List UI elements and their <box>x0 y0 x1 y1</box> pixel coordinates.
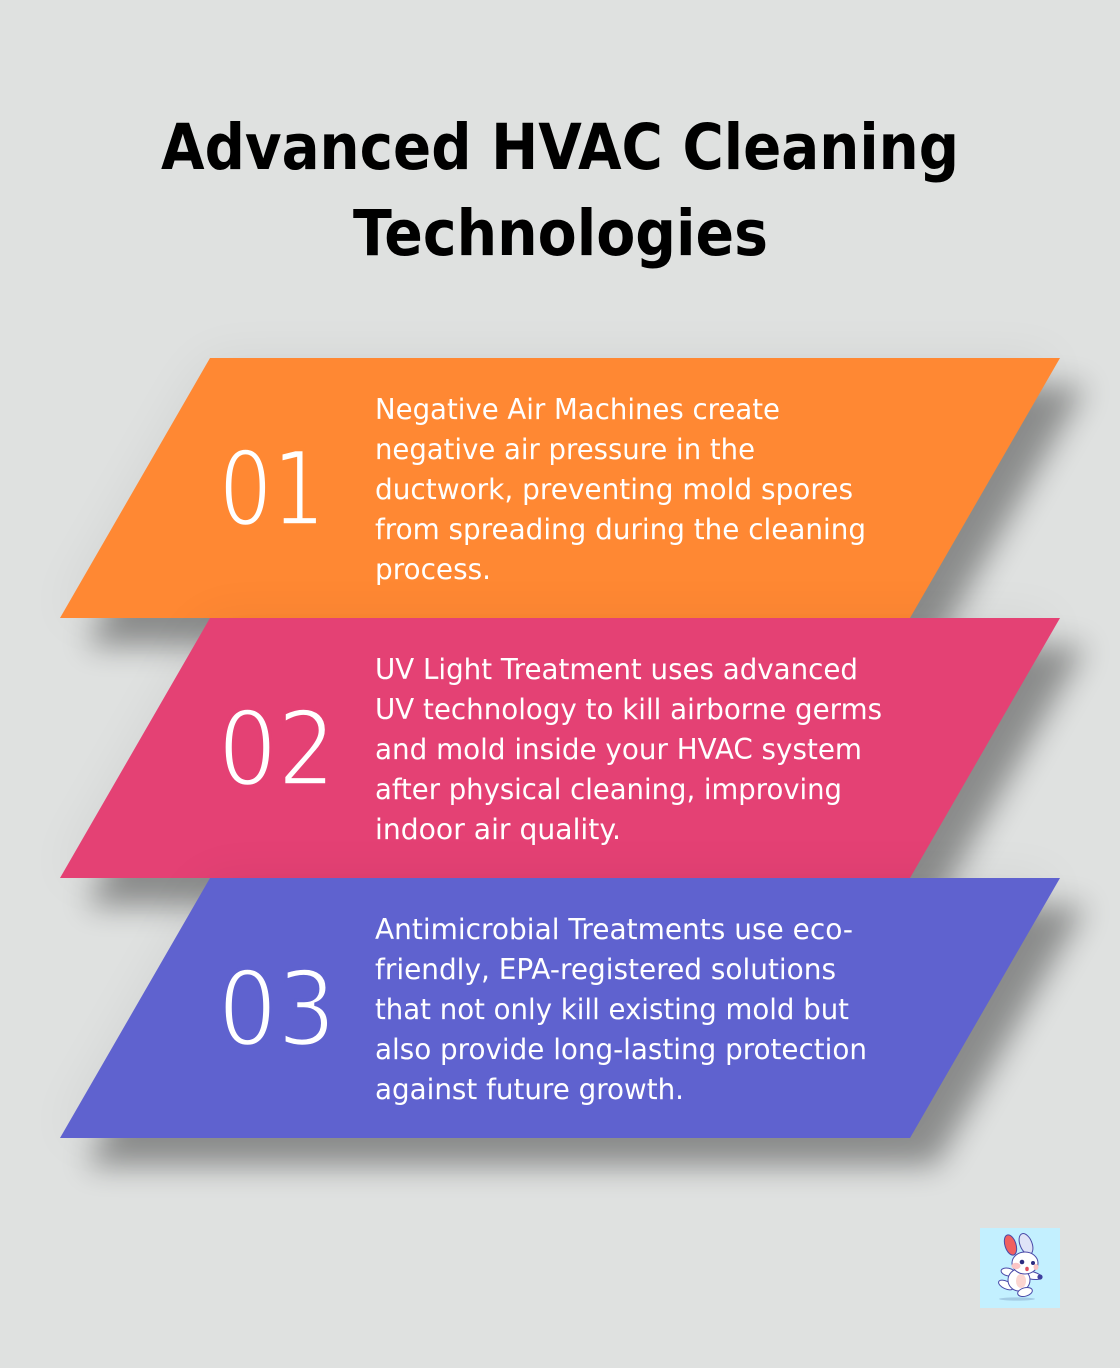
text: step 02 description: after physical cleaning, improving <box>375 773 842 806</box>
text: step 01 description <box>375 393 866 586</box>
text: step 01 description: from spreading during the cleaning <box>375 513 866 546</box>
number 01: 01 <box>219 430 325 550</box>
panel: step 02 <box>60 618 1086 906</box>
text: step 03 description: against future growth. <box>375 1073 684 1106</box>
text: step 01 description: negative air pressure in the <box>375 433 755 466</box>
text: step 03 description: also provide long-lasting protection <box>375 1033 867 1066</box>
text: step 02 description: indoor air quality. <box>375 813 621 846</box>
text: step 01 description: ductwork, preventing mold spores <box>375 473 853 506</box>
text: step 03 description: friendly, EPA-registered solutions <box>375 953 836 986</box>
text: step 03 description: Antimicrobial Treatments use eco- <box>375 913 853 946</box>
text: step 02 description: and mold inside your HVAC system <box>375 733 862 766</box>
title <box>161 111 959 270</box>
icon: rabbit logo <box>980 1228 1060 1308</box>
number 03: 03 <box>218 950 336 1070</box>
panel: step 01 <box>60 358 1086 646</box>
text: step 01 description: Negative Air Machines create <box>375 393 780 426</box>
panel: step 03 <box>60 878 1086 1166</box>
text: step 03 description <box>375 913 867 1106</box>
title: Advanced HVAC Cleaning <box>161 111 959 184</box>
title: Technologies <box>353 197 768 270</box>
text: step 02 description <box>375 653 882 846</box>
text: step 03 description: that not only kill existing mold but <box>375 993 849 1026</box>
text: step 01 description: process. <box>375 553 491 586</box>
text: step 02 description: UV Light Treatment uses advanced <box>375 653 858 686</box>
text: step 02 description: UV technology to kill airborne germs <box>375 693 882 726</box>
number 02: 02 <box>218 690 336 810</box>
